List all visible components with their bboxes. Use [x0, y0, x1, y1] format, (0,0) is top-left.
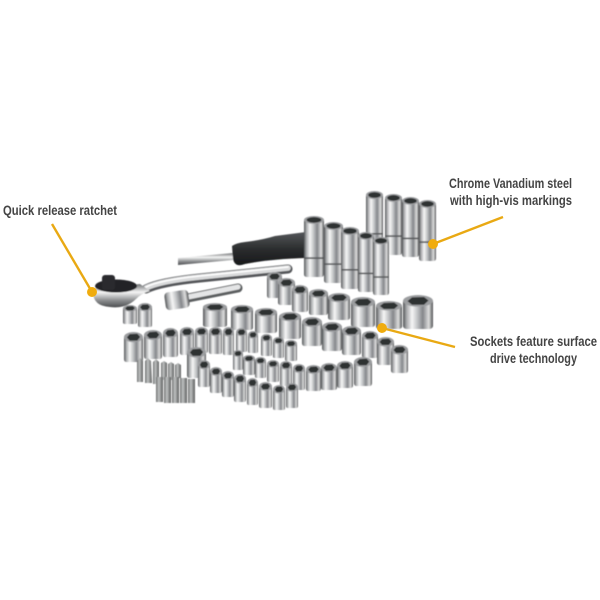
callout: surface drive: [377, 323, 597, 366]
driver bits: [137, 358, 195, 403]
leader dot: [428, 239, 438, 249]
leader line: [52, 224, 92, 292]
lower socket row: [187, 347, 372, 410]
ratchet: [93, 267, 288, 327]
large sockets middle row: [203, 303, 408, 373]
callout label line 2: drive technology: [490, 351, 577, 366]
left socket row: [124, 327, 297, 362]
callout label: Chrome Vanadium steel: [449, 176, 572, 191]
leader line: [433, 217, 503, 244]
deep sockets back row: [366, 191, 436, 261]
deep sockets front row: [304, 216, 389, 295]
screwdriver: [178, 232, 306, 265]
medium sockets upper row: [267, 272, 433, 329]
extension bar: [164, 287, 238, 311]
tool set photo: [93, 191, 436, 410]
leader line: [382, 328, 455, 347]
leader dot: [87, 287, 97, 297]
callout label line 2: with high-vis markings: [449, 193, 572, 208]
callout: quick release ratchet: [3, 203, 117, 297]
callout: chrome vanadium steel: [428, 176, 572, 249]
tiny sockets row: [233, 350, 292, 386]
leader dot: [377, 323, 387, 333]
callout label: Quick release ratchet: [3, 203, 117, 218]
